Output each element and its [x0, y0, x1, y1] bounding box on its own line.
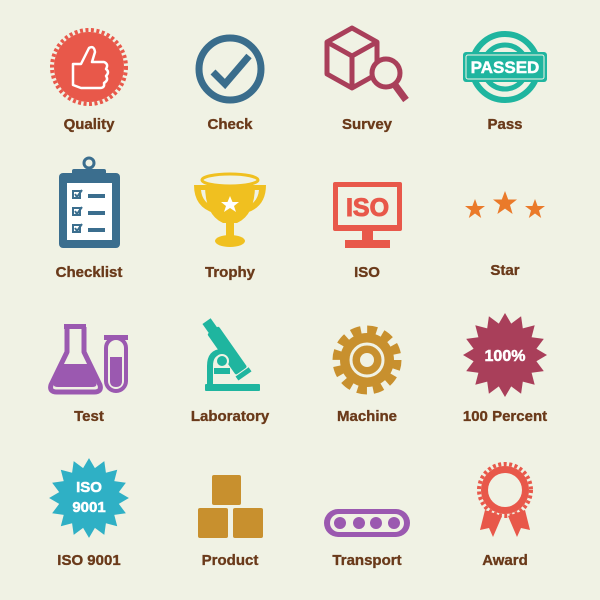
icon: test	[51, 324, 128, 392]
icon: iso 9001 burst: ISO	[76, 479, 102, 496]
icon: stars	[465, 191, 545, 218]
icon: iso monitor: ISO	[346, 194, 389, 222]
icon: iso 9001 burst: 9001	[72, 499, 106, 516]
icon: iso 9001 burst	[49, 458, 129, 538]
icon: iso monitor	[333, 182, 402, 248]
icon: award rosette	[479, 464, 531, 537]
label: product: Product	[202, 552, 258, 569]
icon: trophy	[194, 174, 266, 247]
icon: product boxes	[198, 475, 263, 538]
icon: checklist	[59, 158, 120, 248]
icon: 100 percent burst	[463, 313, 547, 397]
label: star: Star	[490, 262, 520, 279]
label: machine: Machine	[337, 408, 397, 425]
icon: laboratory microscope	[200, 316, 260, 391]
label: iso 9001: ISO 9001	[57, 552, 121, 569]
label: check: Check	[207, 116, 253, 133]
icon: 100 percent burst: 100%	[485, 348, 525, 365]
icon: pass	[463, 34, 547, 100]
label: quality: Quality	[64, 116, 115, 133]
icon: transport conveyor	[324, 509, 410, 537]
icon: survey	[327, 28, 406, 100]
label: trophy: Trophy	[205, 264, 256, 281]
icon: machine gear	[337, 330, 397, 390]
label: 100 percent: 100 Percent	[463, 408, 547, 425]
label: iso: ISO	[354, 264, 380, 281]
label: checklist: Checklist	[56, 264, 122, 281]
icon: quality	[52, 30, 126, 104]
label: pass: Pass	[487, 116, 523, 133]
icon: pass: PASSED	[471, 58, 539, 77]
label: laboratory: Laboratory	[191, 408, 270, 425]
label: transport: Transport	[332, 552, 402, 569]
label: test: Test	[74, 408, 104, 425]
label: award: Award	[482, 552, 528, 569]
label: survey: Survey	[342, 116, 393, 133]
icon: check	[199, 38, 261, 100]
